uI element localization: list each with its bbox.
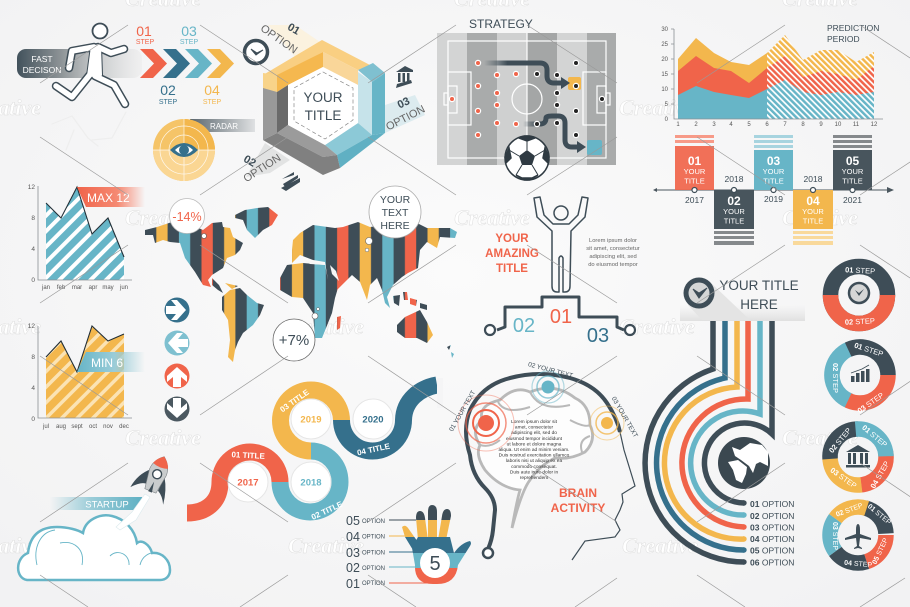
- year labels: 2017: [237, 478, 259, 488]
- teal segment: [280, 451, 340, 512]
- callout: minus 14 percent: [170, 198, 206, 238]
- year labels: 2018: [804, 174, 823, 184]
- cloud puffs: [36, 530, 155, 565]
- axis labels: 30: [661, 27, 669, 33]
- y labels: 4: [31, 246, 35, 253]
- column 02: [714, 190, 754, 245]
- column 03: 03: [767, 154, 780, 168]
- ring segments: [819, 496, 897, 574]
- heading: TITLE: [496, 263, 528, 275]
- area: predicted red: [767, 56, 874, 119]
- watermarks: Creative: [125, 205, 201, 230]
- year labels: [237, 414, 384, 488]
- column 05: [833, 135, 872, 190]
- cloud: [18, 515, 170, 580]
- column 04: TITLE: [803, 216, 823, 226]
- panel: winding timeline: [180, 378, 443, 529]
- brain outline: [475, 388, 593, 528]
- icon: bar chart: [851, 365, 870, 382]
- option labels: OPTION: [258, 23, 299, 57]
- callout: your text here: [365, 186, 421, 252]
- icon: running man: [56, 24, 125, 104]
- heading: YOUR: [495, 233, 529, 245]
- radar text: RADAR: [210, 122, 238, 131]
- panel: startup rocket: [18, 449, 180, 580]
- year labels: 2017: [685, 195, 704, 205]
- option rows: OPTION: [362, 534, 385, 540]
- icon: running man reflection: [52, 112, 126, 150]
- option labels: 01: [285, 21, 302, 38]
- month labels: 5: [747, 122, 751, 128]
- podium end nodes: [485, 325, 635, 335]
- area: red series: [678, 56, 767, 119]
- number disc: 5: [429, 553, 441, 575]
- striped continents: [145, 200, 460, 365]
- red segment: [187, 452, 280, 513]
- pulse labels: 01 YOUR TEXT: [448, 390, 477, 433]
- step labels: 01 STEP: [860, 423, 889, 449]
- year labels: 2021: [843, 195, 862, 205]
- podium numbers: [513, 306, 609, 347]
- y labels: 8: [31, 215, 35, 222]
- area: predicted teal: [767, 80, 874, 119]
- target squares: [568, 77, 602, 155]
- x labels: dec: [119, 424, 129, 430]
- blue segment: [342, 385, 437, 451]
- month labels: [676, 122, 878, 128]
- callout: your text here: YOUR: [380, 194, 410, 206]
- segment titles: 04 TITLE: [356, 442, 391, 457]
- brain text: Duis aute irure dolor in: [510, 469, 558, 475]
- option rows: OPTION: [362, 550, 385, 556]
- step labels: 03 STEP: [831, 522, 838, 550]
- panel: three step ring: [823, 338, 897, 415]
- pitch lines: [444, 33, 610, 165]
- month labels: 2: [694, 122, 698, 128]
- brain folds: [480, 392, 590, 452]
- startup banner: [50, 497, 142, 510]
- axis labels: 5: [665, 102, 669, 108]
- segment titles: 03 TITLE: [278, 387, 311, 414]
- y labels: 0: [31, 277, 35, 284]
- year labels: 2019: [300, 414, 322, 426]
- panel: two step ring: [830, 265, 888, 327]
- panel: world map: [145, 186, 460, 365]
- pulse labels: 03 YOUR TEXT: [610, 396, 639, 439]
- step labels: 04: [204, 82, 220, 98]
- step labels: [845, 265, 875, 327]
- startup label: STARTUP: [85, 500, 129, 510]
- column 04: 04: [806, 194, 820, 208]
- option rows: OPTION: [362, 519, 385, 525]
- step labels: 01 STEP: [866, 503, 892, 527]
- brain text: ut labore et dolore magna: [507, 441, 562, 447]
- striped area: [46, 326, 124, 418]
- pulse: red: [458, 395, 514, 451]
- callout: plus 7 percent: [273, 308, 320, 361]
- map sea details: [303, 260, 339, 281]
- year labels: 2018: [725, 174, 744, 184]
- trend line: [46, 187, 124, 257]
- icon: globe: [718, 437, 770, 489]
- exhaust: [116, 494, 150, 530]
- title: HERE: [740, 297, 778, 312]
- column 04: YOUR: [802, 207, 824, 216]
- y labels: 12: [28, 323, 35, 330]
- callout: minus 14 percent: -14%: [172, 210, 202, 224]
- radar label bar: [190, 119, 255, 132]
- x labels: may: [102, 285, 114, 291]
- step labels: 02 STEP: [827, 426, 853, 455]
- icon: bank: [846, 445, 870, 468]
- panel: five step ring: [819, 496, 897, 574]
- step labels: STEP: [203, 99, 221, 106]
- icon: bank: [396, 66, 413, 88]
- step labels: 02 STEP: [845, 316, 875, 327]
- option rows: OPTION: [362, 581, 385, 587]
- panel: year timeline: [653, 135, 894, 245]
- x labels: aug: [56, 424, 66, 430]
- face profile: [572, 432, 635, 560]
- button: up arrow: [164, 364, 190, 388]
- option rows: 03: [346, 546, 360, 560]
- x labels: nov: [103, 424, 113, 430]
- year labels: 2020: [362, 414, 384, 426]
- hexagon title: TITLE: [305, 108, 341, 123]
- option list: 05 OPTION: [750, 546, 794, 556]
- icon: bar chart: [281, 172, 300, 191]
- axis labels: 20: [661, 57, 669, 63]
- option list: [750, 499, 794, 568]
- brain text: Duis nostrud exercitation ullamco: [499, 453, 570, 459]
- radar disc: [153, 119, 215, 181]
- area: teal series: [678, 86, 767, 119]
- tactical arrows: [484, 63, 586, 153]
- step labels: 01 STEP: [845, 265, 875, 276]
- x labels: jan: [41, 285, 50, 291]
- x labels: apr: [89, 285, 97, 291]
- option rows: [346, 514, 385, 591]
- podium outline: [497, 297, 624, 330]
- axes: [38, 326, 132, 418]
- panel: max area chart: [28, 184, 145, 291]
- panel: fast decision arrow: [17, 23, 234, 150]
- step labels: 04 STEP: [868, 459, 891, 490]
- watermarks: Creative: [619, 314, 695, 339]
- month labels: 6: [765, 122, 769, 128]
- option rows: 01: [346, 577, 360, 591]
- watermarks: Creative: [288, 533, 364, 558]
- area: predicted yellow: [767, 35, 874, 119]
- title shadow: [680, 282, 805, 321]
- option rows: 05: [346, 514, 360, 528]
- icon: rocket: [129, 449, 180, 505]
- step labels: [136, 23, 221, 106]
- panel: brain activity: [448, 361, 639, 560]
- edge masks: [180, 378, 443, 529]
- prediction period label: PREDICTION: [827, 23, 879, 33]
- year labels: 2019: [764, 194, 783, 204]
- heading: AMAZING: [485, 248, 539, 260]
- x labels: [42, 424, 129, 430]
- button: right arrow: [164, 298, 190, 322]
- column 05: YOUR: [842, 167, 863, 176]
- line ends: [741, 500, 747, 565]
- brain text: eiusmod tempor incididunt: [506, 436, 563, 442]
- icon: victory figure: [534, 197, 588, 292]
- axis labels: 25: [661, 42, 669, 48]
- teal segment: [325, 63, 385, 168]
- band: [17, 49, 142, 78]
- year labels: 2018: [300, 478, 322, 488]
- x labels: jul: [42, 424, 49, 430]
- x labels: jun: [119, 285, 128, 291]
- step labels: [831, 502, 892, 569]
- option list: 04 OPTION: [750, 534, 794, 544]
- brain text: amet, consectetur: [515, 425, 553, 431]
- watermarks: Creative: [622, 533, 698, 558]
- grey segment: [263, 85, 340, 175]
- watermarks: Creative: [782, 205, 858, 230]
- callout: your text here: HERE: [380, 220, 410, 232]
- axis labels: 0: [665, 117, 669, 123]
- watermarks: Creative: [125, 425, 201, 450]
- step labels: 03 STEP: [856, 391, 885, 415]
- lorem text: sit amet, consectetur: [586, 246, 640, 252]
- title: YOUR TITLE: [719, 278, 799, 293]
- pulse labels: 02 YOUR TEXT: [527, 361, 574, 380]
- max label: MAX 12: [87, 191, 130, 205]
- label: fast decision: FAST: [31, 54, 53, 64]
- panel: your title here lines: [645, 278, 805, 568]
- x labels: oct: [89, 424, 97, 430]
- panel: strategy pitch: [437, 17, 616, 180]
- ring segments: [823, 338, 897, 412]
- column 01: YOUR: [684, 167, 705, 176]
- callout: your text here: TEXT: [382, 207, 409, 219]
- option labels: OPTION: [384, 103, 427, 133]
- month labels: 3: [712, 122, 716, 128]
- callout: plus 7 percent: +7%: [279, 332, 309, 349]
- year markers: [692, 188, 855, 192]
- panel: four step ring: [826, 423, 891, 490]
- trend line: [46, 326, 124, 372]
- axis labels: 15: [661, 72, 669, 78]
- month labels: 1: [676, 122, 680, 128]
- brain text: adipiscing elit, sed do: [511, 430, 557, 436]
- option tails: [246, 25, 425, 177]
- step labels: 03: [181, 23, 197, 39]
- button: left arrow: [164, 330, 190, 356]
- option rows: OPTION: [362, 566, 385, 572]
- step labels: [827, 423, 891, 490]
- x labels: feb: [57, 285, 66, 291]
- strategy title: STRATEGY: [469, 17, 533, 31]
- watermarks: Creative: [619, 95, 695, 120]
- yellow segment: [263, 40, 370, 92]
- min label: MIN 6: [91, 356, 123, 370]
- step labels: 02: [160, 82, 176, 98]
- month labels: 7: [783, 122, 787, 128]
- axis: [653, 187, 894, 193]
- axis labels: 10: [661, 87, 669, 93]
- icon: clock: [244, 40, 268, 64]
- heading: ACTIVITY: [551, 501, 605, 515]
- brain text: reprehenderit: [520, 475, 549, 481]
- chevron arrows: [140, 49, 234, 78]
- players: [449, 60, 605, 138]
- icon: airplane: [845, 524, 871, 549]
- lorem text: Lorem ipsum dolor: [589, 238, 637, 244]
- watermarks: Creative: [288, 95, 364, 120]
- button: down arrow: [164, 396, 190, 422]
- max tag: [77, 187, 145, 207]
- option rows: 04: [346, 530, 360, 544]
- option list: 06 OPTION: [750, 558, 794, 568]
- panel: arrow buttons: [164, 298, 190, 422]
- podium numbers: 02: [513, 315, 535, 337]
- step labels: 02 STEP: [835, 502, 864, 519]
- brain text: commodo consequat.: [511, 464, 557, 470]
- step labels: 01: [136, 23, 152, 39]
- option labels: 03: [396, 95, 412, 111]
- segment titles: 01 TITLE: [231, 450, 266, 461]
- option labels: 02: [241, 153, 258, 170]
- column 01: TITLE: [684, 176, 705, 186]
- column 01: [675, 135, 714, 190]
- chart axes: [671, 29, 883, 119]
- column 05: TITLE: [842, 176, 863, 186]
- pulse: teal: [532, 371, 564, 403]
- heading: BRAIN: [559, 486, 597, 500]
- y labels: 4: [31, 385, 35, 392]
- option labels: [241, 21, 427, 185]
- y labels: 0: [31, 416, 35, 423]
- neck node: [483, 548, 493, 558]
- hand colour bands: [402, 505, 471, 584]
- x labels: [41, 285, 128, 291]
- striped area: [46, 187, 124, 280]
- watermarks: Creative: [288, 314, 364, 339]
- icon: clock: [684, 278, 714, 308]
- segment titles: [231, 387, 391, 522]
- x labels: sept: [71, 424, 83, 430]
- podium numbers: 03: [587, 325, 609, 347]
- yellow segment: [280, 390, 342, 451]
- lorem text: adipiscing elit, sed: [589, 254, 637, 260]
- leader lines: [389, 520, 428, 583]
- watermarks: Creative: [454, 205, 530, 230]
- column 04: [793, 190, 833, 245]
- axis labels: [661, 27, 669, 123]
- option list: 01 OPTION: [750, 499, 794, 509]
- option list: 02 OPTION: [750, 511, 794, 521]
- pitch stripes: [437, 33, 616, 165]
- curved lines: [645, 321, 772, 562]
- icon: soccer ball: [505, 136, 549, 180]
- step labels: 05 STEP: [872, 537, 890, 566]
- month labels: 8: [801, 122, 805, 128]
- month labels: 11: [853, 122, 860, 128]
- step labels: STEP: [159, 99, 177, 106]
- podium numbers: 01: [550, 306, 572, 328]
- panel: prediction area chart: [661, 23, 883, 128]
- segment titles: 02 TITLE: [310, 499, 345, 522]
- step labels: 02 STEP: [831, 363, 840, 393]
- y labels: 12: [28, 184, 35, 191]
- ring segments: [826, 425, 890, 489]
- option rows: 02: [346, 561, 360, 575]
- step labels: 03 STEP: [829, 466, 858, 490]
- y labels: [28, 184, 35, 284]
- column 03: YOUR: [763, 167, 784, 176]
- hexagon title: YOUR: [303, 90, 343, 105]
- month labels: 12: [871, 122, 878, 128]
- step labels: 01 STEP: [853, 341, 884, 359]
- column 03: [754, 135, 793, 190]
- y labels: [28, 323, 35, 423]
- panel: hexagon diagram: [241, 21, 427, 191]
- column 05: 05: [846, 154, 859, 168]
- prediction period label: PERIOD: [827, 34, 860, 44]
- month labels: 10: [835, 122, 842, 128]
- column 02: YOUR: [723, 207, 745, 216]
- step labels: STEP: [180, 39, 198, 46]
- step labels: [831, 341, 885, 415]
- min tag: [77, 352, 145, 372]
- brain text: laboris nisi ut aliquip ex ea: [506, 458, 562, 464]
- y labels: 8: [31, 354, 35, 361]
- panel: min area chart: [28, 323, 145, 430]
- panel: hand options: [346, 505, 471, 588]
- option list: 03 OPTION: [750, 522, 794, 532]
- step labels: 04 STEP: [844, 560, 873, 569]
- column 02: TITLE: [724, 216, 744, 226]
- pulse labels: [448, 361, 639, 439]
- head outline: [466, 374, 620, 549]
- pulse: yellow: [590, 406, 624, 440]
- column 03: TITLE: [763, 176, 784, 186]
- axes: [38, 186, 132, 280]
- inner hexagon: [288, 67, 358, 145]
- brain text: Lorem ipsum dolor sit: [511, 420, 557, 425]
- month labels: 9: [819, 122, 823, 128]
- column 01: 01: [688, 154, 701, 168]
- icon: clock: [849, 283, 869, 303]
- year labels: [685, 174, 862, 205]
- panel: radar: [153, 119, 255, 181]
- month labels: 4: [729, 122, 733, 128]
- icon: eye: [170, 143, 198, 157]
- panel: podium: [485, 197, 640, 347]
- area: yellow series: [678, 38, 767, 119]
- label: fast decision: DECISON: [23, 65, 61, 75]
- step labels: STEP: [136, 39, 154, 46]
- x labels: mar: [72, 285, 82, 291]
- option labels: OPTION: [241, 152, 283, 185]
- column 02: 02: [727, 194, 741, 208]
- year discs: [228, 399, 393, 502]
- brain text: aliqua. Ut enim ad minim veniam.: [499, 447, 569, 453]
- ring segments: [830, 266, 888, 324]
- watermarks: Creative: [782, 425, 858, 450]
- lorem text: do eiusmod tempor: [588, 262, 638, 268]
